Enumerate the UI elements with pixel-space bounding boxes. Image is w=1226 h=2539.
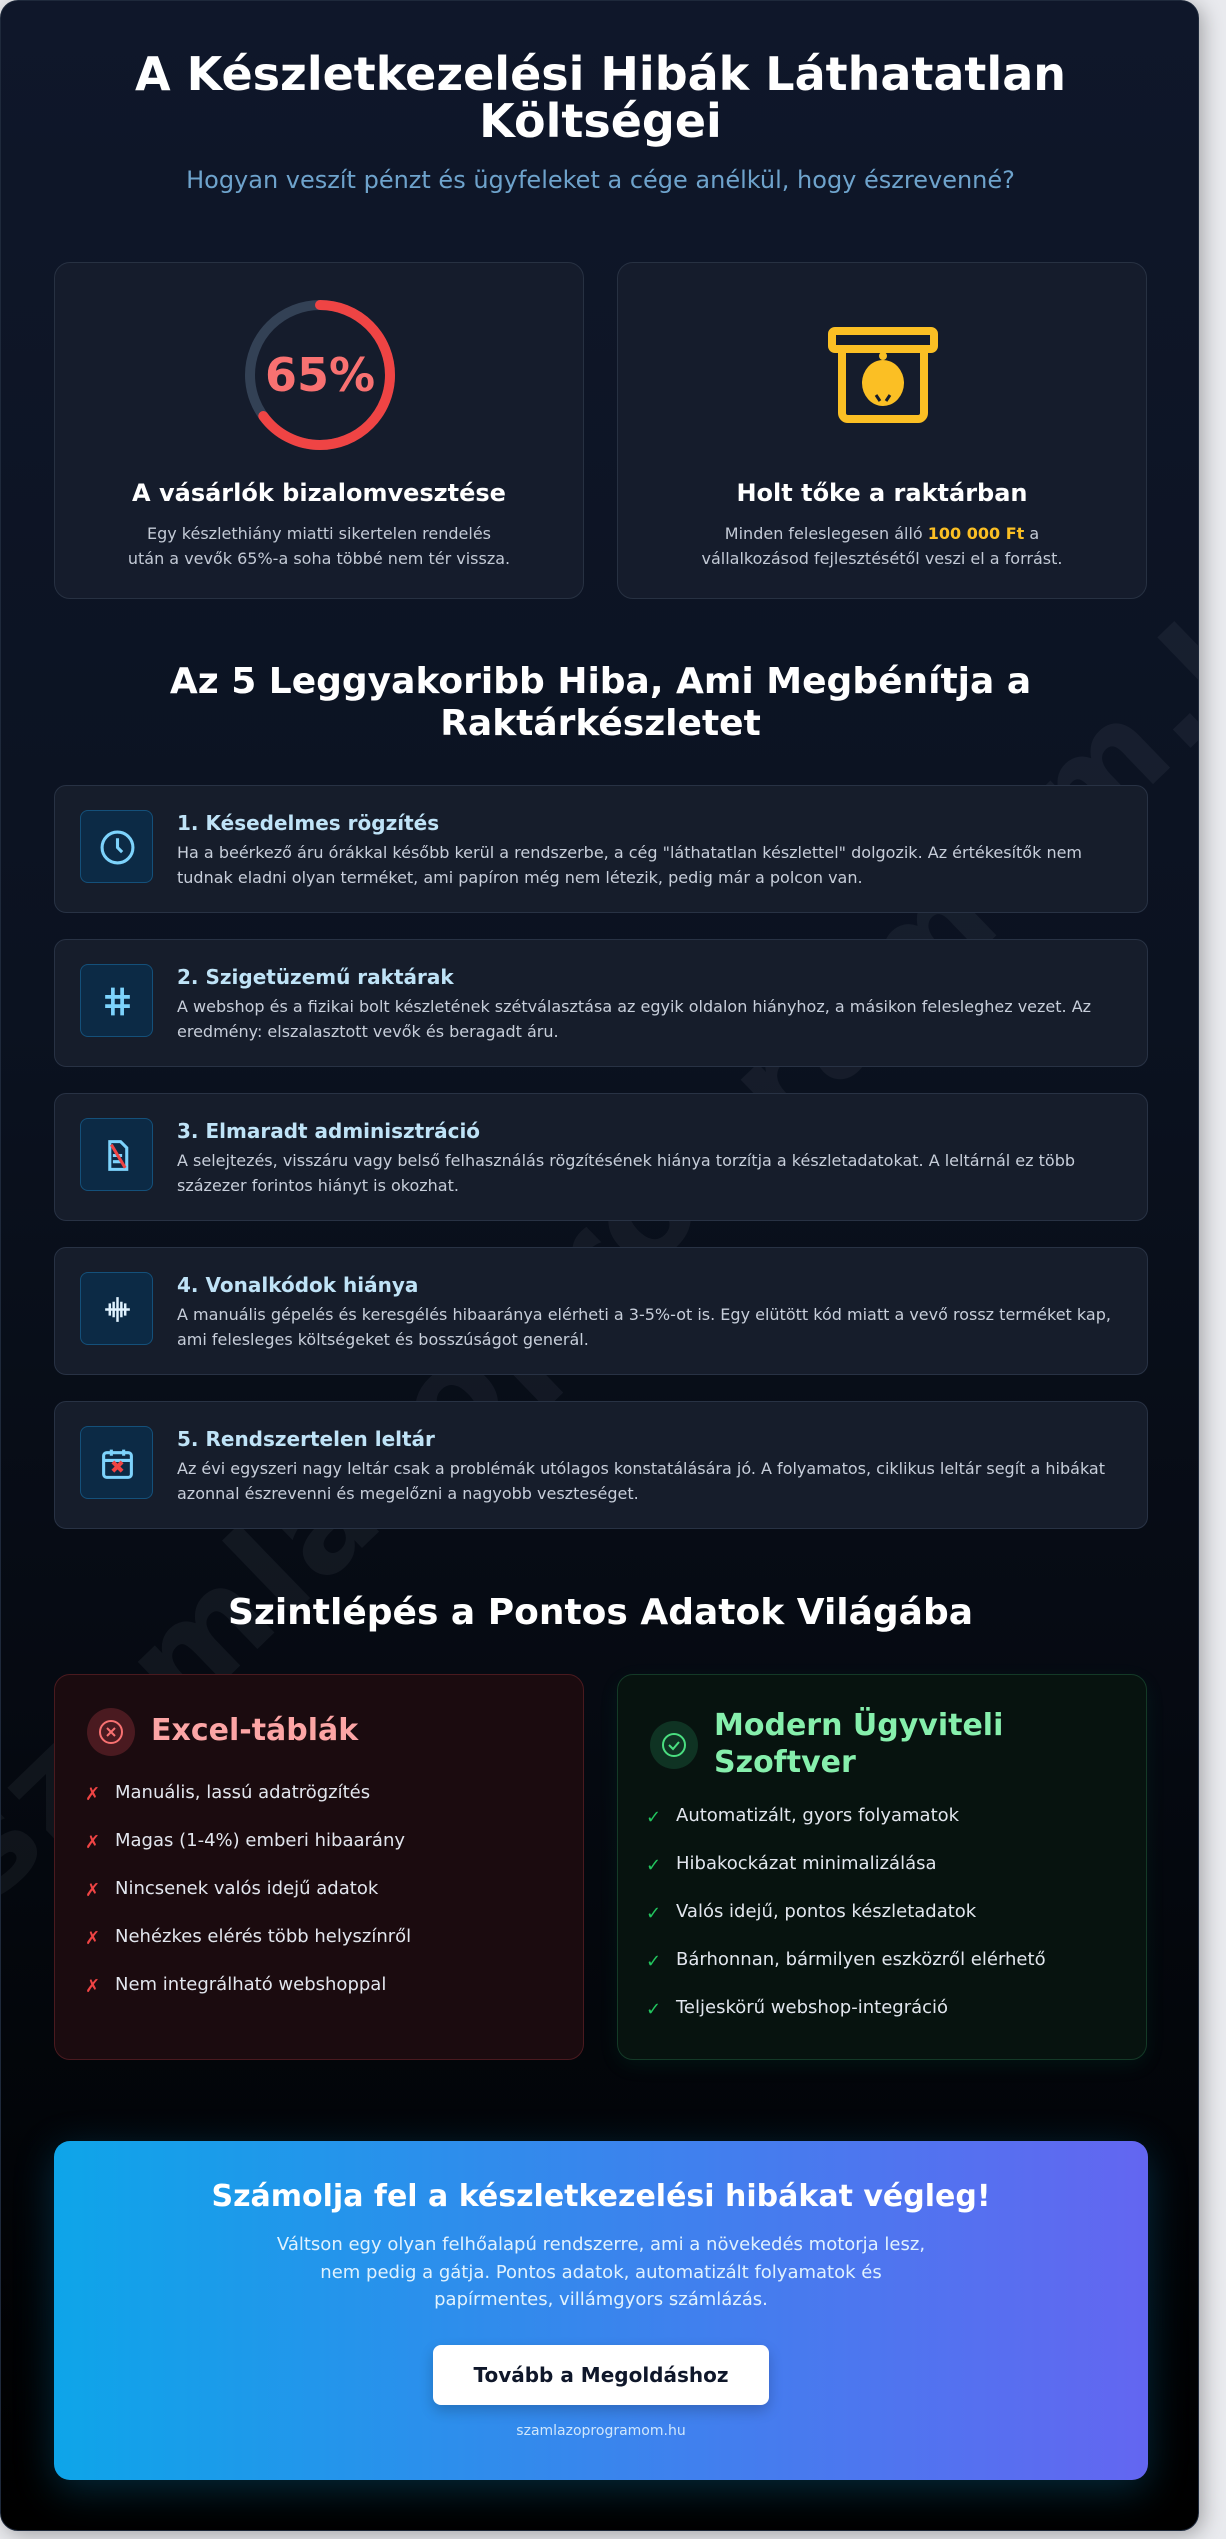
text: Minden feleslegesen álló 100 000 Ft a	[725, 524, 1039, 543]
button: Tovább a Megoldáshoz	[473, 2363, 729, 2387]
text: után a vevők 65%-a soha többé nem tér vissza.	[128, 549, 510, 568]
item text: tudnak eladni olyan terméket, ami papíron még nem létezik, pedig már a polcon van.	[177, 868, 863, 887]
heading: Excel-táblák	[151, 1713, 358, 1748]
panel: customer trust loss	[54, 262, 584, 599]
icon: hash	[80, 964, 153, 1037]
panel: mistake 1	[54, 785, 1148, 913]
panel: mistake 2	[54, 939, 1148, 1067]
list: Teljeskörű webshop-integráció	[676, 1997, 948, 2018]
chart: 65% donut	[245, 300, 395, 450]
item title: 3. Elmaradt adminisztráció	[177, 1119, 480, 1143]
panel: modern software: ✓	[646, 1999, 661, 2020]
list	[646, 1805, 1046, 2020]
icon: check circle	[650, 1721, 698, 1769]
heading: A vásárlók bizalomvesztése	[132, 479, 506, 507]
item text: százezer forintos hiányt is okozhat.	[177, 1176, 459, 1195]
item text: Az évi egyszeri nagy leltár csak a problémák utólagos konstatálására jó. A folyamatos, ciklikus leltár segít a hibákat	[177, 1459, 1105, 1478]
footer url: szamlazoprogramom.hu	[516, 2423, 686, 2439]
button	[433, 2345, 769, 2405]
panel: excel: ✗	[85, 1784, 100, 1805]
section heading: 5 mistakes: Raktárkészletet	[440, 703, 761, 744]
title: Költségei	[479, 94, 722, 148]
panel: modern software: ✓	[646, 1807, 661, 1828]
item text: A webshop és a fizikai bolt készletének szétválasztása az egyik oldalon hiányhoz, a másikon felesleghez vezet. Az	[177, 997, 1091, 1016]
item text	[177, 1305, 1111, 1349]
panel: call to action	[54, 2141, 1148, 2480]
list: Automatizált, gyors folyamatok	[676, 1805, 959, 1826]
item text: ami felesleges költségeket és bosszúságot generál.	[177, 1330, 589, 1349]
item text	[177, 1459, 1105, 1503]
section heading: level up: Szintlépés a Pontos Adatok Világába	[228, 1592, 973, 1633]
cta text: nem pedig a gátja. Pontos adatok, automatizált folyamatok és	[320, 2262, 882, 2282]
item title: 5. Rendszertelen leltár	[177, 1427, 435, 1451]
list: Magas (1-4%) emberi hibaarány	[115, 1830, 405, 1851]
item text	[177, 843, 1082, 887]
text: Egy készlethiány miatti sikertelen rendelés	[147, 524, 491, 543]
icon: clock	[80, 810, 153, 883]
icon: money jar	[828, 327, 938, 423]
panel: modern software	[617, 1674, 1147, 2060]
panel: excel: ✗	[85, 1976, 100, 1997]
panel: dead capital	[617, 262, 1147, 599]
panel: excel: ✗	[85, 1880, 100, 1901]
panel: mistake 4	[54, 1247, 1148, 1375]
chart: 65% donut: 65%	[265, 348, 375, 402]
panel: mistake 3	[54, 1093, 1148, 1221]
panel: excel	[54, 1674, 584, 2060]
list: Manuális, lassú adatrögzítés	[115, 1782, 370, 1803]
panel: modern software: ✓	[646, 1855, 661, 1876]
section heading: 5 mistakes	[170, 661, 1031, 744]
cta heading: Számolja fel a készletkezelési hibákat végleg!	[211, 2179, 991, 2214]
item text: azonnal észrevenni és megelőzni a nagyobb veszteséget.	[177, 1484, 639, 1503]
icon: x circle	[87, 1708, 135, 1756]
panel: excel: ✗	[85, 1832, 100, 1853]
item text: Ha a beérkező áru órákkal később kerül a rendszerbe, a cég "láthatatlan készlettel" dolgozik. Az értékesítők nem	[177, 843, 1082, 862]
heading: Holt tőke a raktárban	[736, 479, 1028, 507]
list: Nehézkes elérés több helyszínről	[115, 1926, 411, 1947]
item text: A selejtezés, visszáru vagy belső felhasználás rögzítésének hiánya torzítja a készletadatokat. A leltárnál ez több	[177, 1151, 1075, 1170]
heading: Modern Ügyviteli	[714, 1708, 1003, 1743]
item text	[177, 1151, 1075, 1195]
text	[702, 524, 1062, 568]
list: Bárhonnan, bármilyen eszközről elérhető	[676, 1949, 1046, 1970]
cta text: Váltson egy olyan felhőalapú rendszerre, ami a növekedés motorja lesz,	[277, 2234, 925, 2255]
cta text: papírmentes, villámgyors számlázás.	[434, 2289, 768, 2310]
list: Valós idejű, pontos készletadatok	[676, 1901, 976, 1922]
item text: eredmény: elszalasztott vevők és beragadt áru.	[177, 1022, 559, 1041]
heading	[714, 1707, 1003, 1780]
item text: A manuális gépelés és keresgélés hibaaránya elérheti a 3-5%-ot is. Egy elütött kód miatt a vevő rossz terméket kap,	[177, 1305, 1111, 1324]
item title: 4. Vonalkódok hiánya	[177, 1273, 418, 1297]
section heading: 5 mistakes: Az 5 Leggyakoribb Hiba, Ami Megbénítja a	[170, 661, 1031, 702]
list	[85, 1782, 411, 1997]
text: vállalkozásod fejlesztésétől veszi el a forrást.	[702, 549, 1062, 568]
title: A Készletkezelési Hibák Láthatatlan	[135, 47, 1066, 101]
cta text	[277, 2234, 925, 2310]
heading: Szoftver	[714, 1745, 856, 1780]
item title: 1. Késedelmes rögzítés	[177, 811, 439, 835]
panel: modern software: ✓	[646, 1903, 661, 1924]
item text	[177, 997, 1091, 1041]
subtitle: Hogyan veszít pénzt és ügyfeleket a cége anélkül, hogy észrevenné?	[186, 166, 1015, 194]
icon: calendar x	[80, 1426, 153, 1499]
list: Hibakockázat minimalizálása	[676, 1853, 937, 1874]
list: Nem integrálható webshoppal	[115, 1974, 386, 1995]
text	[128, 524, 510, 568]
item title: 2. Szigetüzemű raktárak	[177, 965, 454, 989]
panel: excel: ✗	[85, 1928, 100, 1949]
title	[135, 47, 1066, 148]
icon: barcode	[80, 1272, 153, 1345]
icon: document	[80, 1118, 153, 1191]
list: Nincsenek valós idejű adatok	[115, 1878, 378, 1899]
panel: modern software: ✓	[646, 1951, 661, 1972]
panel: mistake 5	[54, 1401, 1148, 1529]
